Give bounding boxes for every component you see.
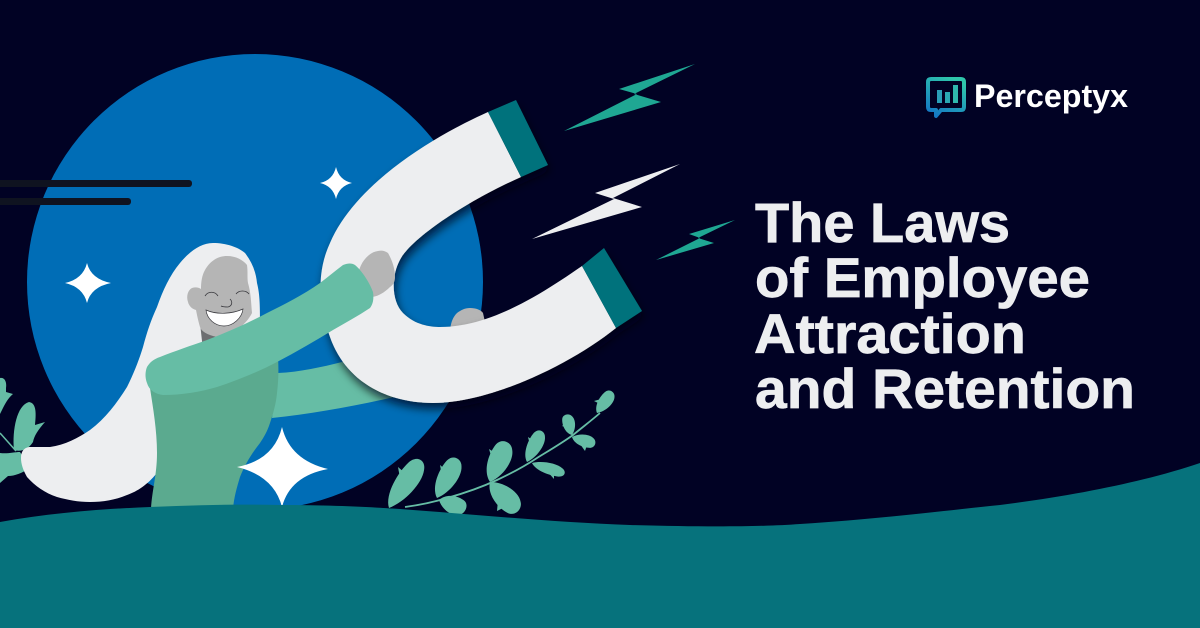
bolt teal upper	[564, 64, 695, 131]
magnet lower tip	[582, 248, 642, 328]
lightning bolts	[532, 64, 735, 260]
bolt teal small	[656, 220, 735, 260]
title: Attraction	[754, 302, 1026, 365]
neck	[200, 323, 225, 350]
sparkles	[65, 167, 352, 507]
title: and Retention	[755, 357, 1135, 420]
sparkle left	[65, 263, 111, 303]
head	[187, 256, 252, 337]
magnet body	[321, 112, 616, 403]
blue circle backdrop	[27, 54, 483, 510]
smile	[206, 309, 243, 326]
logo	[928, 78, 1128, 116]
lower hand	[450, 308, 485, 330]
torso	[150, 358, 278, 509]
right foliage sprig	[379, 388, 618, 519]
woman illustration	[21, 100, 642, 509]
front arm	[146, 264, 373, 395]
motion lines	[0, 180, 192, 205]
horseshoe magnet	[321, 100, 642, 403]
magnet top tip	[488, 100, 548, 177]
logo wordmark: Perceptyx	[974, 78, 1128, 114]
ground wave	[0, 463, 1200, 628]
logo icon	[928, 79, 964, 116]
bolt white	[532, 164, 680, 239]
left foliage	[0, 378, 45, 483]
hair	[21, 243, 260, 502]
sparkle large	[237, 427, 328, 507]
title	[754, 191, 1135, 420]
title: of Employee	[755, 246, 1090, 309]
upper hand	[358, 251, 395, 297]
title: The Laws	[755, 191, 1010, 254]
back arm	[272, 350, 420, 418]
eyes and nose	[205, 291, 249, 307]
sparkle small top	[320, 167, 352, 199]
